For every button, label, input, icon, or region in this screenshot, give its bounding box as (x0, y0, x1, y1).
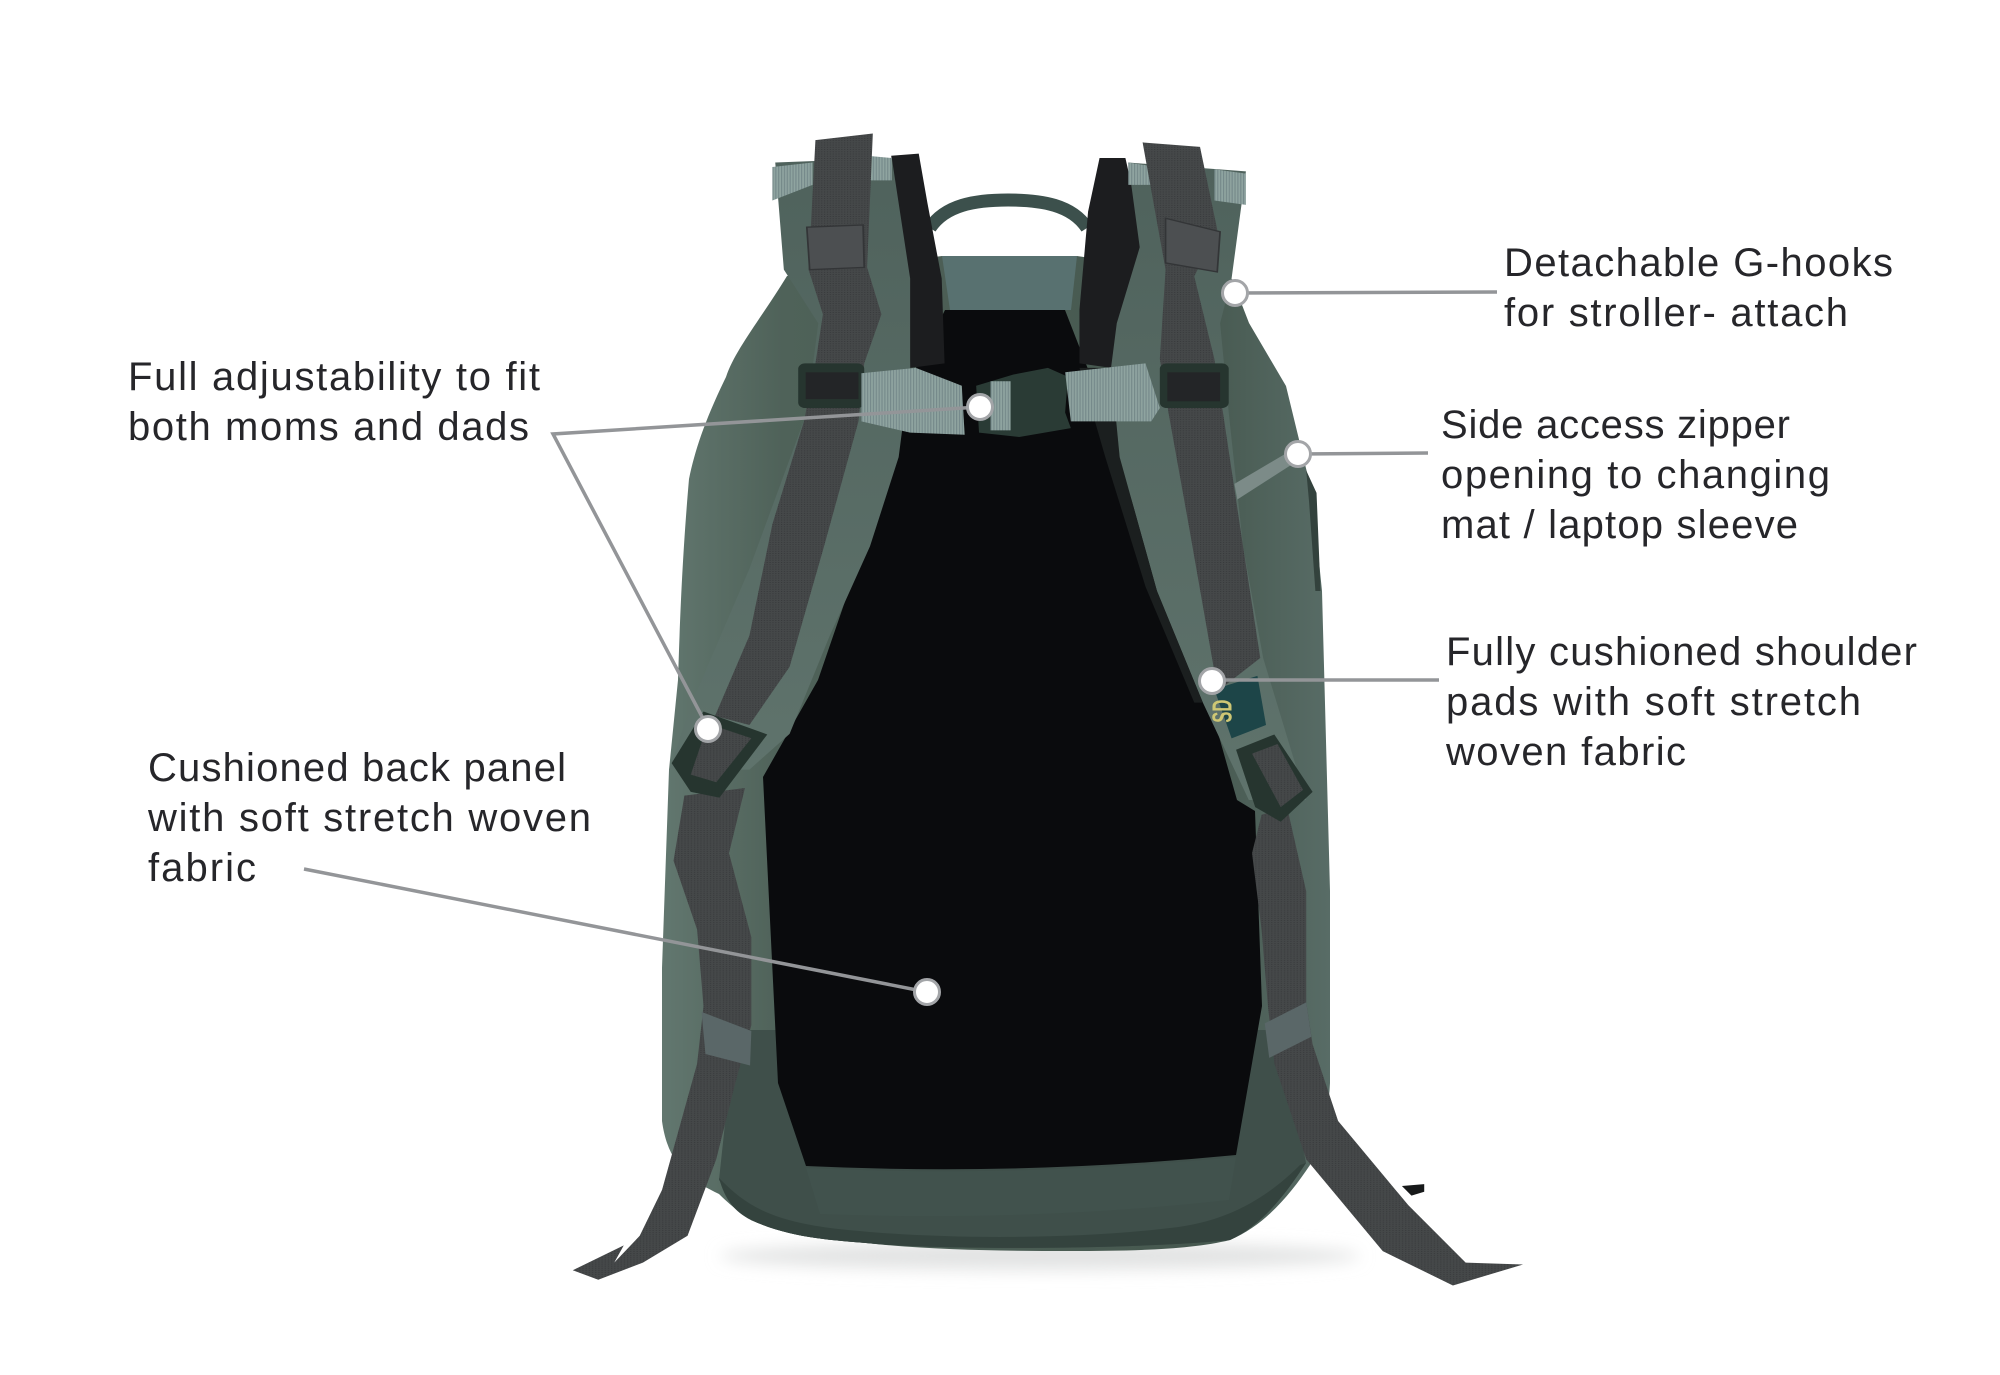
leader lines (304, 292, 1497, 992)
dot: side zipper (1286, 442, 1310, 466)
right strap end (1402, 1184, 1424, 1196)
bag body (662, 256, 1330, 1251)
sternum webbing right (1065, 363, 1160, 421)
label: G-hooks (1504, 241, 1893, 335)
label: side zipper: mat / laptop sleeve (1441, 503, 1798, 547)
side zipper pull (1234, 448, 1303, 500)
back-edge dark lines (1079, 368, 1203, 703)
shoulder pads and upper parts (669, 133, 1321, 800)
label: shoulder pads: woven fabric (1445, 730, 1686, 774)
top tabs (772, 162, 813, 200)
left strap loop (702, 1012, 751, 1065)
right green pad (1111, 162, 1306, 800)
dot: sternum (968, 394, 992, 420)
right keeper (1166, 218, 1220, 272)
dot: G-hooks (1222, 280, 1248, 306)
right lower strap (1252, 807, 1523, 1286)
left inner black pad (891, 154, 945, 368)
left sternum slider (798, 363, 864, 408)
left strap (715, 133, 881, 725)
line: side zipper (1298, 453, 1428, 454)
backpack illustration (573, 133, 1523, 1286)
sternum webbing left (861, 368, 965, 435)
brand tag: SD (1206, 700, 1238, 723)
line: shoulder pads (1212, 678, 1439, 682)
lower panel (719, 1030, 1306, 1248)
label: back panel (147, 746, 591, 890)
floor shadow (720, 1242, 1360, 1270)
label: G-hooks: for stroller- attach (1504, 291, 1848, 335)
label: shoulder pads: pads with soft stretch (1446, 680, 1861, 724)
side seam (1306, 471, 1321, 591)
top handle (930, 200, 1087, 228)
cushioned back panel (763, 310, 1262, 1169)
right adjuster buckle (1236, 734, 1313, 822)
line: G-hooks (1235, 292, 1497, 293)
right inner black pad (1079, 158, 1143, 368)
label: G-hooks: Detachable G-hooks (1504, 241, 1893, 285)
left adjuster buckle (672, 711, 767, 798)
callout dots (696, 280, 1310, 1004)
label: shoulder pads (1445, 630, 1917, 774)
right sternum slider (1160, 363, 1229, 408)
label: side zipper: opening to changing (1441, 453, 1830, 497)
label: adjustability: both moms and dads (128, 405, 529, 449)
line: back panel (304, 869, 927, 992)
left keeper (807, 225, 864, 270)
left green pad (669, 158, 910, 770)
label: side zipper: Side access zipper (1441, 403, 1790, 447)
dot: shoulder pad (1200, 668, 1224, 694)
label: back panel: with soft stretch woven (147, 796, 591, 840)
sternum buckle (976, 368, 1071, 437)
sternum webbing centre (990, 381, 1011, 430)
dot: back panel (914, 980, 940, 1004)
dot: lower buckle (696, 716, 720, 742)
label: adjustability: Full adjustability to fit (128, 355, 540, 399)
right strap (1143, 142, 1260, 689)
label: shoulder pads: Fully cushioned shoulder (1446, 630, 1917, 674)
top panel between pads (942, 256, 1077, 310)
label: back panel: Cushioned back panel (148, 746, 566, 790)
line: adjustability (553, 407, 979, 728)
left lower strap (573, 788, 751, 1280)
right strap loop (1265, 1002, 1311, 1058)
bottom mesh band (806, 1157, 1236, 1216)
label: back panel: fabric (148, 846, 256, 890)
bottom rim (719, 1163, 1306, 1248)
brand tag (1206, 676, 1266, 738)
label: side zipper (1441, 403, 1830, 547)
lower straps and buckles (573, 711, 1523, 1286)
label: adjustability (128, 355, 540, 449)
